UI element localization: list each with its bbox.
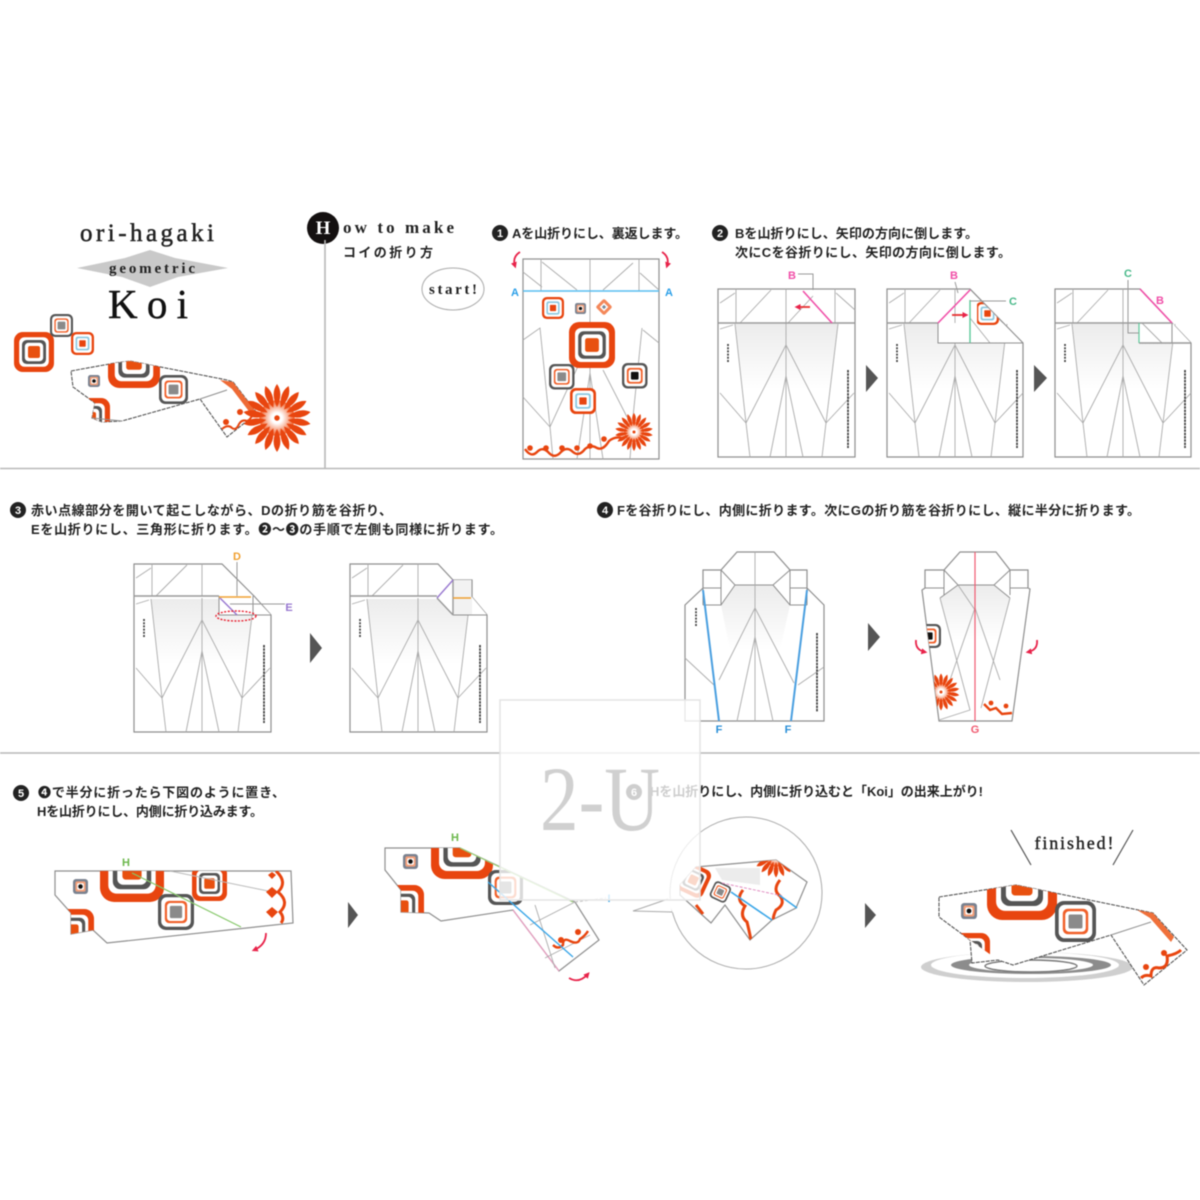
- step 5 instruction: Hを山折りにし、内側に折り込みます。: [37, 804, 263, 819]
- step 4: [597, 502, 1140, 736]
- diagram 5b: H: [451, 832, 459, 844]
- step 4 number: 4: [602, 505, 609, 517]
- step 2 instruction: 次にCを谷折りにし、矢印の方向に倒します。: [735, 245, 1011, 260]
- finished label: [1011, 830, 1133, 865]
- paper with pattern: [523, 259, 659, 459]
- chrysanthemum: [243, 384, 311, 452]
- step 3 instruction: [31, 503, 503, 537]
- diagram 3b: [350, 564, 487, 732]
- arrow: [1034, 365, 1047, 392]
- step 1: [492, 225, 688, 459]
- diagram 4a: [685, 552, 824, 736]
- diagram 3a: E: [285, 602, 293, 614]
- step 3 number: 3: [15, 505, 21, 517]
- watermark panel: 2-U: [500, 700, 700, 900]
- step 3: [10, 502, 503, 732]
- step 5 number: 5: [18, 788, 24, 800]
- arrow: [310, 633, 322, 663]
- diagram 4b: [916, 552, 1037, 736]
- heading: How to make: [307, 212, 454, 260]
- step 5 number: [13, 785, 29, 801]
- title: Koi: Koi: [108, 281, 188, 327]
- step 2 number: [712, 225, 728, 241]
- water ripples: [921, 952, 1133, 982]
- diagram 3a: D: [233, 551, 241, 563]
- floating squares: [14, 314, 94, 372]
- diagram 2b: B: [950, 270, 958, 282]
- step 4 instruction: Fを谷折りにし、内側に折ります。次にGの折り筋を谷折りにし、縦に半分に折ります。: [617, 503, 1140, 518]
- title: ori-hagaki: ori-hagaki: [80, 220, 214, 247]
- step 2 instruction: Bを山折りにし、矢印の方向に倒します。: [735, 226, 978, 241]
- diagram 4b: G: [971, 724, 979, 736]
- flip arrows: [514, 252, 668, 266]
- diamond banner: [77, 250, 228, 287]
- subtitle: geometric: geometric: [109, 261, 195, 277]
- diagram 2a: B: [788, 270, 796, 282]
- heading Japanese: コイの折り方: [343, 245, 433, 260]
- diagram 2a: [718, 270, 855, 457]
- diagram 4a: F: [716, 724, 723, 736]
- step 2 instruction: [735, 226, 1011, 260]
- diagram 5a: [50, 838, 293, 953]
- step 6: [626, 784, 1187, 985]
- diagram 2b: [887, 270, 1023, 457]
- labels A: [511, 287, 673, 299]
- step 3 instruction: Eを山折りにし、三角形に折ります。❷〜❸の手順で左側も同様に折ります。: [31, 522, 503, 537]
- koi body: [70, 360, 256, 438]
- diagram 2c: [1055, 268, 1191, 457]
- magnifier callout: [633, 817, 822, 969]
- fold line A: [523, 290, 659, 292]
- hero koi illustration: [14, 314, 311, 452]
- step 6 number: [626, 784, 642, 800]
- arrow: [865, 903, 876, 928]
- start badge: [422, 268, 484, 310]
- step 1 number: [492, 225, 508, 241]
- finished label: finished!: [1034, 833, 1114, 853]
- step 5: [13, 785, 611, 980]
- step 6 instruction: Hを山折りにし、内側に折り込むと「Koi」の出来上がり!: [650, 784, 983, 799]
- step 4 number: [597, 502, 613, 518]
- diagram 5b: [380, 817, 611, 980]
- diagram 3a: [134, 551, 293, 732]
- H badge: [307, 212, 339, 244]
- step 1 number: 1: [497, 228, 503, 240]
- start badge: start!: [429, 282, 477, 298]
- step 1 instruction: Aを山折りにし、裏返します。: [512, 226, 688, 241]
- heading text: ow to make: [343, 218, 454, 237]
- step 2 number: 2: [717, 228, 723, 240]
- diagram 2c: B: [1156, 295, 1164, 307]
- arrow: [866, 365, 878, 392]
- diagram 2c: C: [1124, 268, 1132, 280]
- H badge: H: [316, 218, 331, 239]
- step 3 number: [10, 502, 26, 518]
- labels A: A: [511, 287, 519, 299]
- koi body: [939, 885, 1187, 985]
- step 2: [712, 225, 1191, 457]
- diagram 5b: I: [607, 893, 611, 905]
- finished koi with ripples: [920, 884, 1188, 986]
- labels A: A: [665, 287, 673, 299]
- section dividers: [0, 240, 1200, 753]
- step 6 number: 6: [631, 787, 637, 799]
- step 5 instruction: ❹で半分に折ったら下図のように置き、: [38, 785, 285, 800]
- step 3 instruction: 赤い点線部分を開いて起こしながら、Dの折り筋を谷折り、: [31, 503, 392, 518]
- title block: ori-hagaki geometric Koi: [77, 220, 228, 327]
- arrow: [348, 902, 358, 928]
- diagram 2b: C: [1009, 296, 1017, 308]
- arrow: [868, 623, 880, 651]
- diagram 4a: F: [785, 724, 792, 736]
- step 5 instruction: [37, 785, 285, 819]
- diagram 5a: H: [122, 857, 130, 869]
- watermark panel: 2-U: 2-U: [540, 748, 660, 850]
